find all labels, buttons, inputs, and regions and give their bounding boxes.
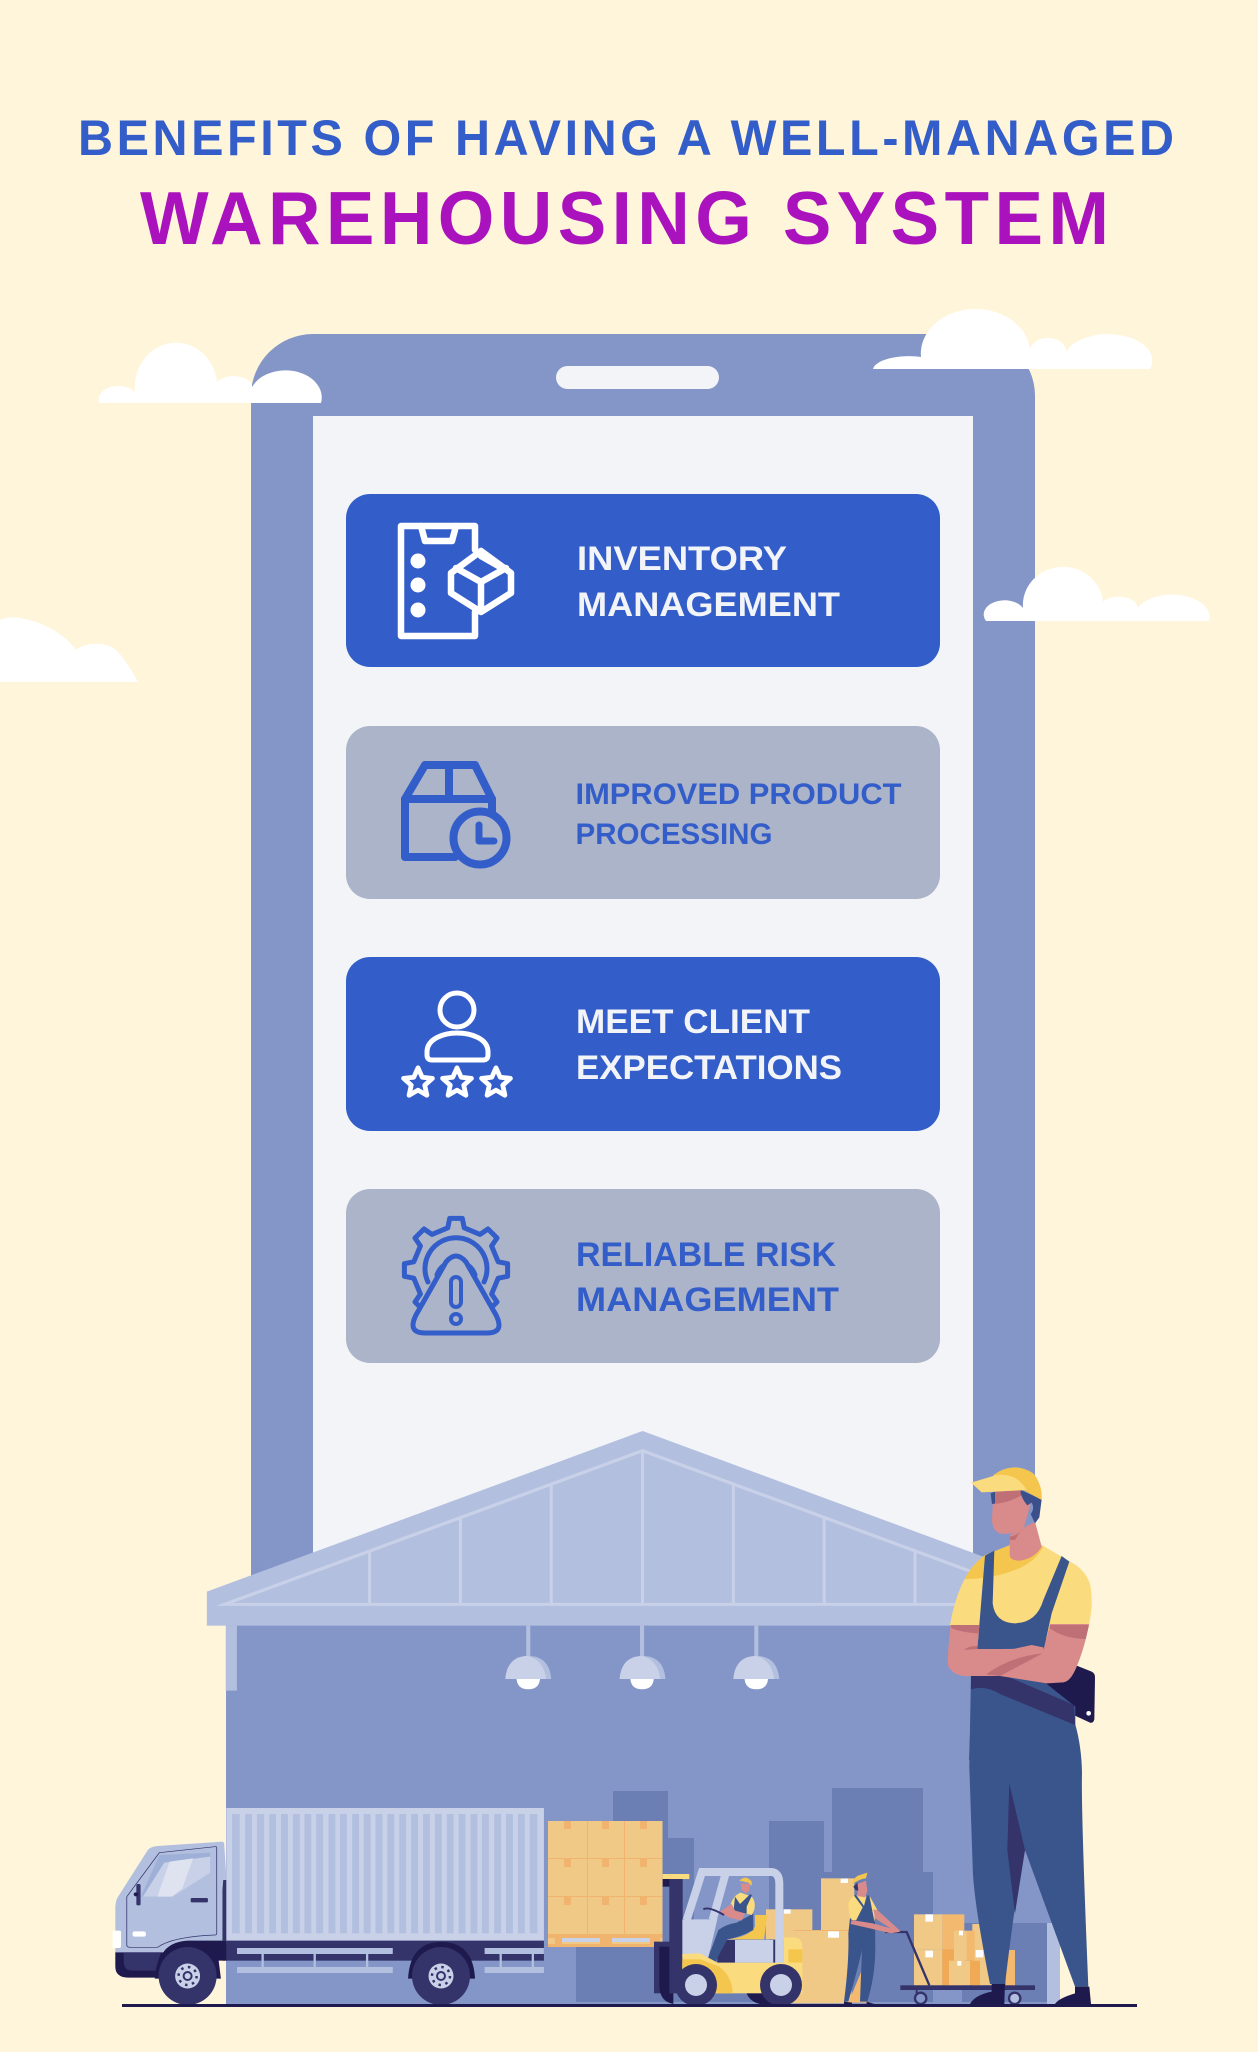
cardboard boxes behind forklift [766, 1878, 867, 2003]
label: improved product processing: IMPROVED PRODUCT [576, 778, 902, 811]
panel: meet client expectations [346, 957, 940, 1131]
title: BENEFITS OF HAVING A WELL-MANAGED [78, 110, 1174, 166]
icon: gear with warning triangle [404, 1218, 508, 1333]
phone frame [251, 334, 1035, 1640]
title: WAREHOUSING SYSTEM [140, 176, 1109, 260]
truck wheels [159, 1947, 470, 2005]
warehouse wall [226, 1620, 1060, 2004]
hand cart [885, 1932, 1035, 2004]
label: meet client expectations: EXPECTATIONS [576, 1049, 842, 1087]
panel: reliable risk management [346, 1189, 940, 1363]
label: reliable risk management [576, 1236, 839, 1319]
boxes on hand cart [914, 1914, 1015, 1985]
forklift driver [703, 1878, 775, 1963]
truck cab [113, 1842, 475, 1979]
panel: inventory management [346, 494, 940, 667]
cloud: middle left [0, 617, 138, 682]
label: inventory management [577, 540, 840, 624]
truck container [226, 1808, 544, 1941]
title [78, 110, 1174, 260]
background shelving silhouettes [576, 1788, 1060, 2004]
worker torso and head [948, 1467, 1095, 1760]
label: improved product processing [576, 778, 902, 851]
truck [113, 1808, 544, 2005]
cloud: top left [99, 343, 322, 403]
label: meet client expectations [576, 1003, 842, 1087]
icon: box with clock [405, 765, 506, 864]
label: reliable risk management: RELIABLE RISK [576, 1236, 836, 1274]
worker pushing cart [844, 1873, 901, 2004]
icon: phone with box [401, 526, 511, 636]
stacked boxes on pallet [548, 1821, 662, 1947]
label: improved product processing: PROCESSING [576, 818, 772, 851]
ceiling lamps [505, 1626, 779, 1689]
warehouse roof [207, 1431, 1078, 1691]
warehouse floor scene [654, 1872, 1035, 2006]
ground line [122, 2004, 1137, 2007]
icon: client with stars [404, 993, 510, 1095]
worker legs [969, 1673, 1091, 2004]
truck chassis and side rails [222, 1941, 544, 1973]
forklift [654, 1872, 802, 2006]
large worker with clipboard [948, 1467, 1095, 2004]
cloud: top right [873, 309, 1152, 369]
label: meet client expectations: MEET CLIENT [576, 1003, 810, 1041]
panel: improved product processing [346, 726, 940, 899]
cloud: middle right [984, 567, 1210, 621]
label: inventory management: MANAGEMENT [577, 586, 840, 624]
label: inventory management: INVENTORY [577, 540, 787, 578]
label: reliable risk management: MANAGEMENT [576, 1281, 839, 1319]
